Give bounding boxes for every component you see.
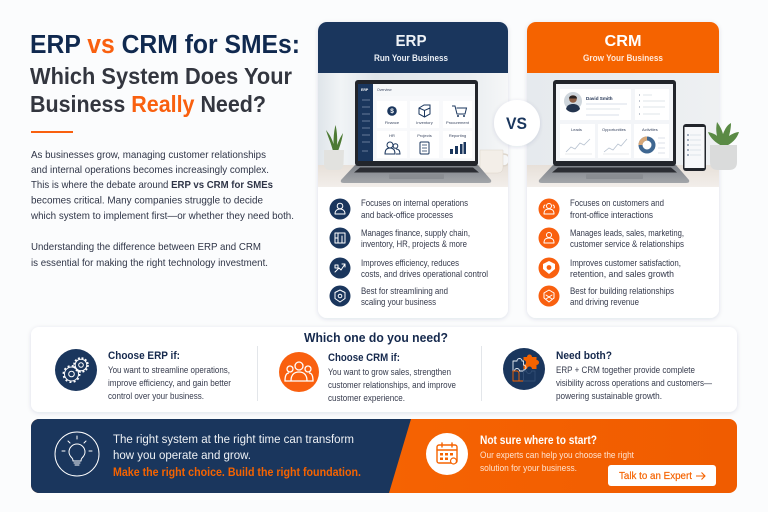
bullet 2: Manages leads, sales, marketing, xyxy=(570,227,684,238)
call to action text: Our experts can help you choose the right xyxy=(480,450,634,460)
option: choose ERP: improve efficiency, and gain better xyxy=(108,378,231,388)
panel: CRM xyxy=(527,22,739,318)
bullet 2 xyxy=(330,227,470,249)
icon: light bulb xyxy=(55,432,99,476)
banner xyxy=(31,419,737,493)
option: choose ERP: control over your business. xyxy=(108,391,204,401)
title xyxy=(30,31,300,117)
banner message: how you operate and grow. xyxy=(113,448,251,462)
laptop xyxy=(539,80,689,183)
intro text: becomes critical. Many companies struggle to decide xyxy=(31,196,263,206)
dashboard tile: finance: Finance xyxy=(385,120,400,125)
activities donut card: Activities xyxy=(642,127,658,132)
option: need both: powering sustainable growth. xyxy=(556,391,662,401)
option: need both: ERP + CRM together provide complete xyxy=(556,365,695,375)
bullet 3: retention, and sales growth xyxy=(570,268,674,279)
heading: Which one do you need? xyxy=(304,330,448,345)
intro text: This is where the debate around ERP vs CRM for SMEs xyxy=(31,180,273,191)
call to action text: solution for your business. xyxy=(480,463,577,473)
bullet 1 xyxy=(538,197,664,220)
title: Business Really Need? xyxy=(30,91,266,117)
dashboard tile: inventory xyxy=(416,104,433,125)
bullet 2: inventory, HR, projects & more xyxy=(361,238,467,249)
option: choose ERP xyxy=(55,349,231,401)
activity list card xyxy=(635,89,669,120)
dashboard tile: HR xyxy=(384,134,400,154)
title: ERP vs CRM for SMEs: xyxy=(30,31,300,59)
ERP bullets xyxy=(330,197,488,307)
plant xyxy=(708,122,739,170)
panel: ERP xyxy=(318,22,509,318)
opportunities chart card xyxy=(598,124,631,158)
ERP laptop photo xyxy=(318,73,509,187)
bullet 4: Best for building relationships xyxy=(570,285,674,296)
panel: which one do you need xyxy=(31,327,737,412)
icon: puzzle xyxy=(503,348,545,390)
call to action text xyxy=(480,435,634,473)
CRM laptop photo xyxy=(527,73,739,187)
banner navy and orange background xyxy=(31,419,737,493)
laptop: Overview xyxy=(377,88,392,92)
bullet 3: Improves customer satisfaction, xyxy=(570,257,681,268)
dashboard tile: projects: Projects xyxy=(417,133,432,138)
bullet 4 xyxy=(330,285,448,307)
option: choose CRM: customer relationships, and improve xyxy=(328,380,456,390)
banner message xyxy=(113,432,361,479)
title: Which System Does Your xyxy=(30,63,292,89)
leads chart card xyxy=(560,124,595,158)
option: need both: visibility across operations and customers— xyxy=(556,378,713,388)
contact card: David Smith xyxy=(586,96,613,101)
dashboard tile: HR: HR xyxy=(389,133,395,138)
dashboard tile: reporting: Reporting xyxy=(449,133,466,138)
laptop xyxy=(341,80,491,183)
button: talk to an expert xyxy=(608,465,716,486)
dashboard tile: procurement xyxy=(446,106,469,124)
button: talk to an expert: Talk to an Expert xyxy=(619,470,692,482)
ERP header: Run Your Business xyxy=(374,53,448,64)
option: need both xyxy=(503,348,713,401)
ERP header: ERP xyxy=(396,33,426,50)
bullet 4: and driving revenue xyxy=(570,296,639,307)
option: choose CRM: Choose CRM if: xyxy=(328,352,400,364)
contact card xyxy=(560,89,631,120)
bullet 1 xyxy=(330,197,468,220)
icon: gears xyxy=(55,349,97,391)
option: choose ERP: You want to streamline operations, xyxy=(108,365,230,375)
laptop: ERP xyxy=(361,88,369,92)
CRM header: CRM xyxy=(604,33,642,50)
dashboard tile: finance: $ xyxy=(390,108,394,115)
bullet 3 xyxy=(538,257,681,279)
dashboard tile: inventory: Inventory xyxy=(416,120,433,125)
option: choose CRM: customer experience. xyxy=(328,393,405,403)
plant xyxy=(324,125,344,165)
intro text: is essential for making the right technology investment. xyxy=(31,258,268,269)
bullet 2 xyxy=(538,227,684,249)
CRM header xyxy=(527,22,719,73)
option: need both: Need both? xyxy=(556,350,612,362)
VS badge: VS xyxy=(506,114,527,133)
bullet 1: and back-office processes xyxy=(361,209,453,220)
bullet 4 xyxy=(538,285,674,307)
activities donut card xyxy=(634,124,669,158)
ERP header xyxy=(318,22,508,73)
bullet 4: scaling your business xyxy=(361,296,436,307)
call to action text: Not sure where to start? xyxy=(480,435,597,447)
dashboard tile: procurement: Procurement xyxy=(446,120,470,125)
CRM bullets xyxy=(538,197,684,307)
intro text: which system to implement first—or whether they need both. xyxy=(30,211,294,222)
CRM header: Grow Your Business xyxy=(583,53,663,64)
VS badge xyxy=(494,100,540,146)
phone xyxy=(683,124,706,171)
option: choose ERP: Choose ERP if: xyxy=(108,350,180,362)
banner message: Make the right choice. Build the right foundation. xyxy=(113,465,361,479)
bullet 1: Focuses on internal operations xyxy=(361,197,468,208)
intro text: As businesses grow, managing customer relationships xyxy=(31,150,266,161)
intro text xyxy=(30,150,294,269)
banner message: The right system at the right time can transform xyxy=(113,432,354,446)
bullet 1: Focuses on customers and xyxy=(570,197,664,208)
opportunities chart card: Opportunities xyxy=(602,127,626,132)
bullet 4: Best for streamlining and xyxy=(361,285,448,296)
intro text: Understanding the difference between ERP and CRM xyxy=(31,242,261,253)
bullet 3: costs, and drives operational control xyxy=(361,268,488,279)
option: choose CRM xyxy=(279,352,456,403)
option: choose CRM: You want to grow sales, strengthen xyxy=(328,367,451,377)
bullet 3: Improves efficiency, reduces xyxy=(361,257,459,268)
leads chart card: Leads xyxy=(571,127,582,132)
bullet 1: front-office interactions xyxy=(570,209,653,220)
bullet 3 xyxy=(330,257,488,279)
mug xyxy=(480,150,509,173)
bullet 2: customer service & relationships xyxy=(570,238,684,249)
icon: calendar xyxy=(426,433,468,475)
bullet 2: Manages finance, supply chain, xyxy=(361,227,470,238)
title accent rule xyxy=(31,131,73,133)
dashboard tile: finance xyxy=(385,106,399,124)
intro text: and internal operations becomes increasingly complex. xyxy=(31,165,269,176)
dashboard tile: projects xyxy=(418,134,432,154)
dashboard tile: reporting xyxy=(449,134,466,154)
icon: people xyxy=(279,352,319,392)
